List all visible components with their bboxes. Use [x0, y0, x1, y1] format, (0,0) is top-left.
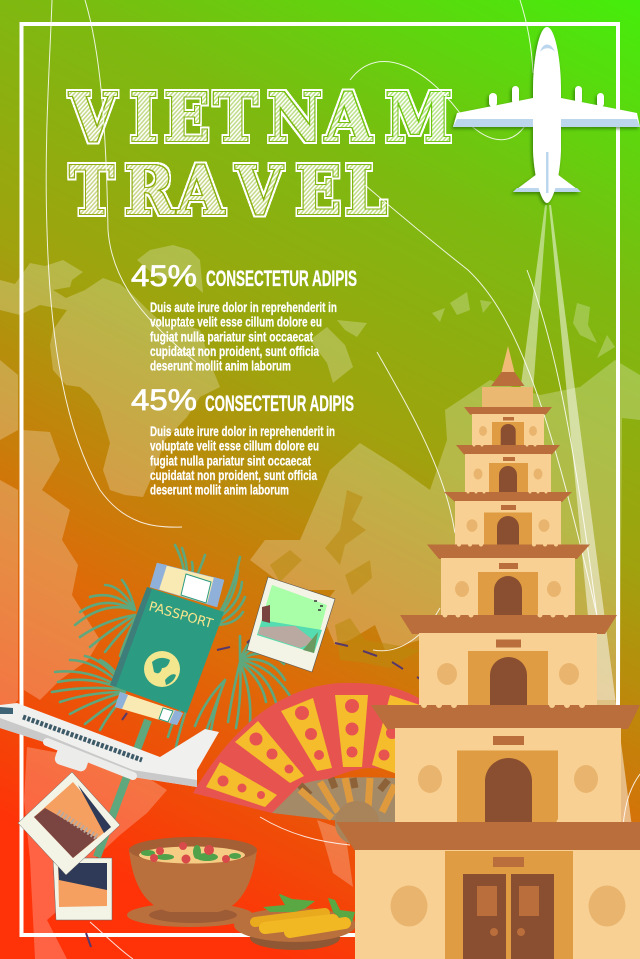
stat block 1: CONSECTETUR ADIPIS — [206, 266, 357, 291]
passport — [110, 563, 224, 725]
stat block 2: 45% — [131, 384, 197, 417]
eave scallops — [399, 445, 618, 822]
stat block 2: Duis aute irure dolor in reprehenderit in — [150, 423, 335, 439]
passport label: PASSPORT — [147, 599, 215, 632]
stat block 1: deserunt mollit anim laborum — [150, 358, 291, 374]
tier 3 — [444, 492, 572, 545]
stat block 2 — [131, 384, 354, 498]
stat block 1 — [131, 260, 357, 374]
noodle bowl — [127, 837, 257, 927]
tier 2 — [456, 445, 560, 492]
dashed flight route — [86, 640, 425, 947]
tier 1 — [464, 407, 552, 447]
stat block 1: voluptate velit esse cillum dolore eu — [150, 314, 322, 330]
green cover — [110, 587, 224, 713]
bottom boarding ticket — [115, 692, 183, 725]
stat block 2: deserunt mollit anim laborum — [150, 482, 289, 498]
title — [68, 79, 452, 231]
pagoda — [336, 346, 640, 959]
polaroid: diamond railway photo — [18, 772, 120, 875]
stat block 1: cupidatat non proident, sunt officia — [150, 343, 319, 359]
double door — [463, 874, 554, 959]
polaroid: bridge photo — [247, 577, 335, 672]
stat block 2: cupidatat non proident, sunt officia — [150, 467, 317, 483]
stat block 1: Duis aute irure dolor in reprehenderit in — [150, 299, 337, 315]
top-view airplane — [453, 27, 640, 203]
title: VIETNAM — [68, 79, 452, 158]
spire — [482, 346, 533, 407]
light beams from plane — [520, 205, 632, 827]
dark map inlets — [270, 490, 420, 668]
top boarding ticket — [150, 563, 224, 607]
stat block 1: fugiat nulla pariatur sint occaecat — [150, 328, 313, 344]
tier 5 — [400, 615, 617, 705]
world map silhouettes — [0, 245, 640, 959]
palm tree — [52, 545, 290, 857]
globe emblem — [144, 651, 180, 687]
base roof and wall — [336, 822, 640, 959]
jet airliner — [0, 703, 219, 787]
tier 6 — [371, 705, 640, 827]
tier 4 — [427, 544, 590, 616]
stat block 1: 45% — [131, 260, 197, 293]
title: TRAVEL — [69, 152, 387, 231]
stat block 2: fugiat nulla pariatur sint occaecat — [150, 452, 311, 468]
spring rolls plate — [234, 894, 356, 950]
stat block 2: voluptate velit esse cillum dolore eu — [150, 438, 319, 454]
polaroid: lower sunset photo — [53, 858, 112, 920]
stat block 2: CONSECTETUR ADIPIS — [205, 391, 354, 416]
fan — [193, 683, 430, 845]
